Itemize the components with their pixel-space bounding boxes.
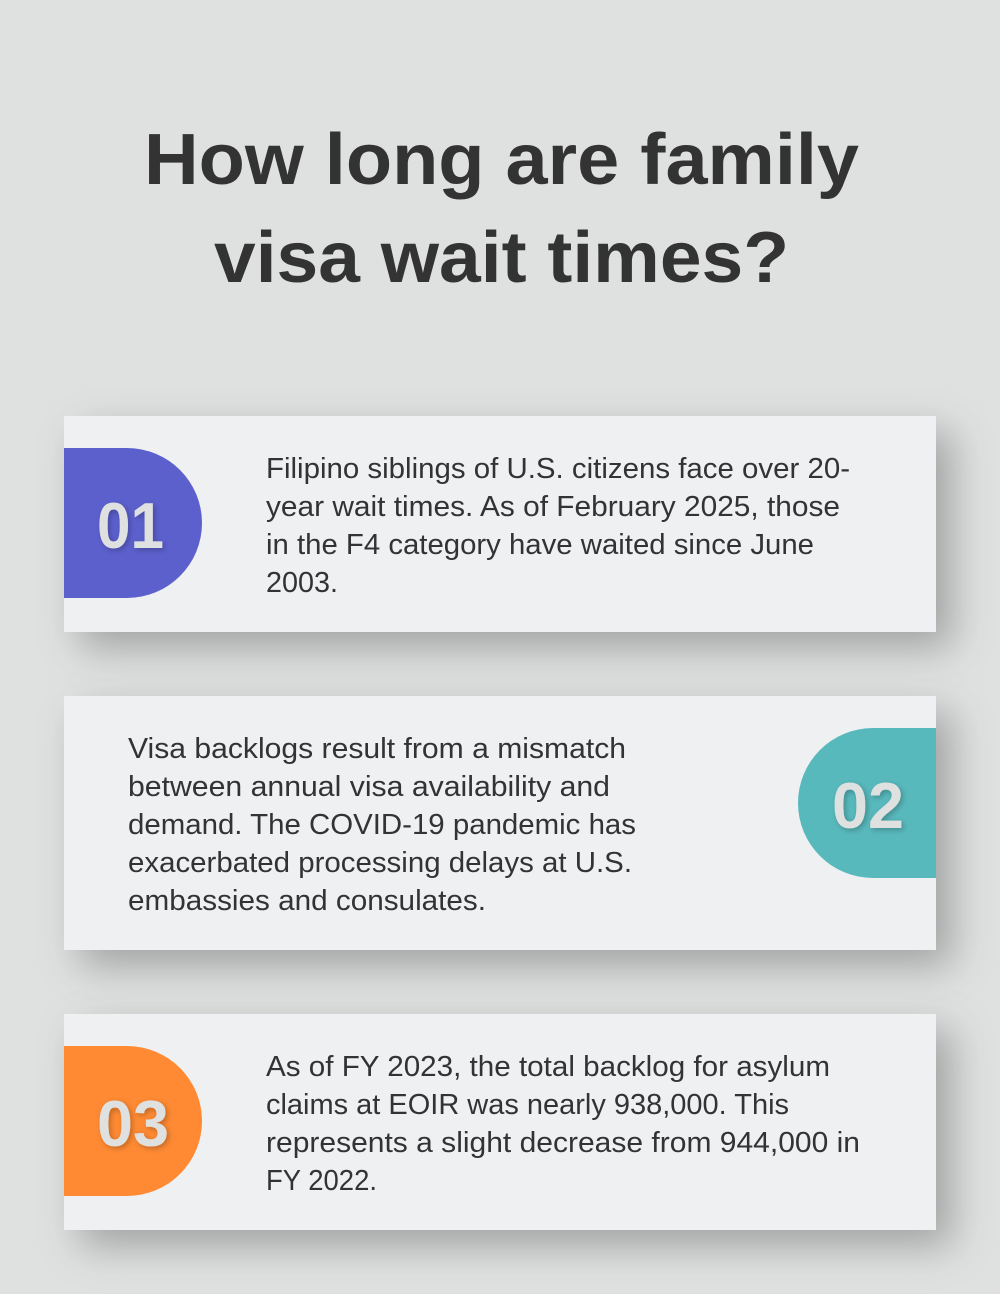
text block 03: As of FY 2023, the total backlog for asylum xyxy=(266,1051,830,1083)
number badge 03: 03 xyxy=(97,1087,169,1160)
panel: step 03 xyxy=(64,1014,936,1230)
text block 01 xyxy=(266,453,850,599)
title: visa wait times? xyxy=(214,218,789,298)
card background 01 xyxy=(64,416,936,632)
card background 02 xyxy=(64,696,936,950)
number badge 02 xyxy=(798,728,936,878)
text block 02: between annual visa availability and xyxy=(128,771,610,803)
panel: step 02 xyxy=(64,696,936,950)
text block 01: year wait times. As of February 2025, those xyxy=(266,491,840,523)
number badge 01: 01 xyxy=(97,489,164,562)
title: How long are family xyxy=(144,120,859,200)
text block 02 xyxy=(128,733,636,917)
text block 03 xyxy=(266,1051,860,1197)
text block 02: Visa backlogs result from a mismatch xyxy=(128,733,626,765)
text block 03: represents a slight decrease from 944,000 in xyxy=(266,1127,860,1159)
text block 01: Filipino siblings of U.S. citizens face over 20- xyxy=(266,453,850,485)
panel: step 01 xyxy=(64,416,936,632)
text block 02: demand. The COVID-19 pandemic has xyxy=(128,809,636,841)
text block 03: claims at EOIR was nearly 938,000. This xyxy=(266,1089,789,1121)
number badge 03 xyxy=(64,1046,202,1196)
text block 02: embassies and consulates. xyxy=(128,885,486,917)
text block 01: in the F4 category have waited since June xyxy=(266,529,814,561)
text block 02: exacerbated processing delays at U.S. xyxy=(128,847,632,879)
number badge 01 xyxy=(64,448,202,598)
text block 01: 2003. xyxy=(266,567,338,599)
card background 03 xyxy=(64,1014,936,1230)
number badge 02: 02 xyxy=(832,769,904,842)
text block 03: FY 2022. xyxy=(266,1165,377,1197)
title xyxy=(144,120,859,298)
